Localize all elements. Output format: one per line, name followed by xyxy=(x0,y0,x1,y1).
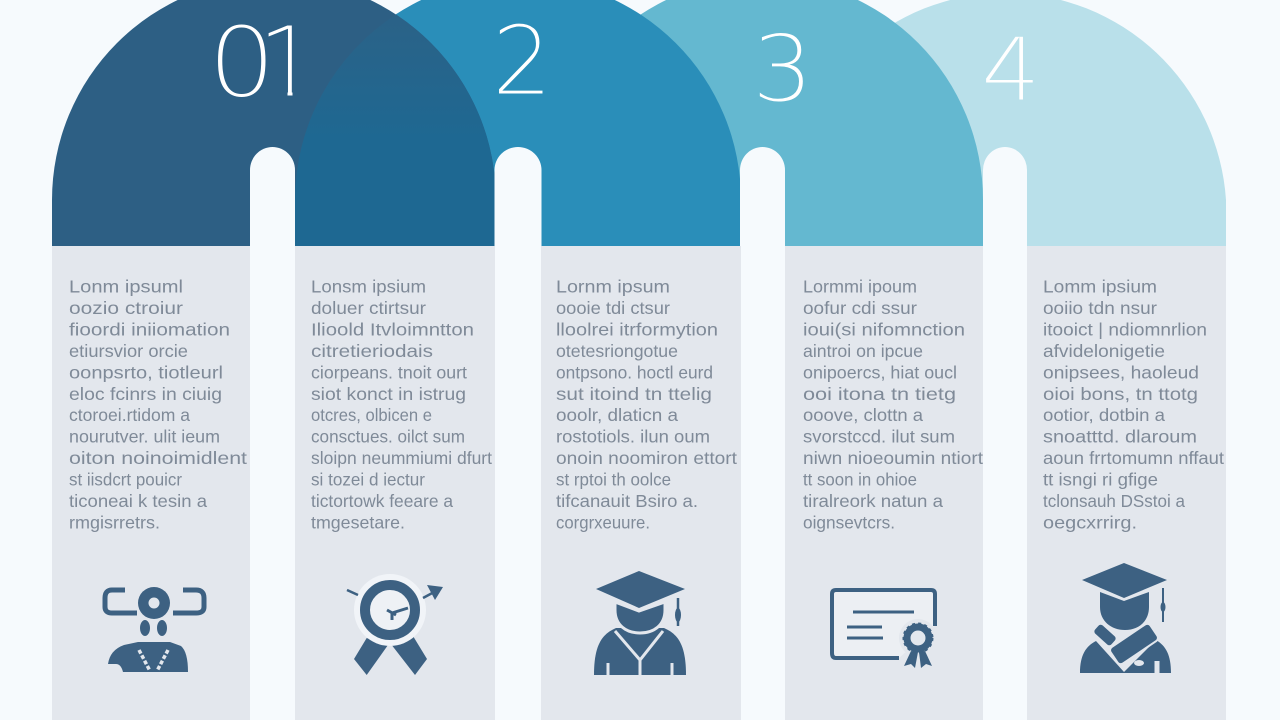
column 4 text: oofur cdi ssur xyxy=(803,298,917,318)
column 4 xyxy=(785,246,983,720)
column 5 text: tclonsauh DSstoi a xyxy=(1043,491,1185,511)
column 4 text: tt soon in ohioe xyxy=(803,470,917,490)
arch 4 with number: 4 xyxy=(981,20,1041,121)
column 1 text: Lonm ipsuml xyxy=(69,276,183,296)
column 1 text: ticoneai k tesin a xyxy=(69,491,207,511)
column 5 text: onipsees, haoleud xyxy=(1043,362,1199,382)
column 2 xyxy=(295,246,495,720)
column 3 text: st rptoi th oolce xyxy=(556,470,671,490)
column 5 text: snoatttd. dlaroum xyxy=(1043,427,1197,447)
column 1 text: oozio ctroiur xyxy=(69,298,183,318)
column 2 text: tmgesetare. xyxy=(311,512,405,532)
column 4 text: ooi itona tn tietg xyxy=(803,384,956,404)
column 3 text: rostotiols. ilun oum xyxy=(556,427,710,447)
column 4 text: oignsevtcrs. xyxy=(803,512,895,532)
column 2 text: citretieriodais xyxy=(311,341,433,361)
column 5 text: ooiio tdn nsur xyxy=(1043,298,1157,318)
icon: person with headset xyxy=(105,587,204,672)
column 5 text: ootior, dotbin a xyxy=(1043,405,1165,425)
column 1 text: st iisdcrt pouicr xyxy=(69,470,182,490)
column 1 text: nourutver. ulit ieum xyxy=(69,427,220,447)
column 4 text xyxy=(803,276,983,532)
icon: certificate with seal xyxy=(832,590,937,668)
column 1 text: fioordi iniiomation xyxy=(69,319,230,339)
icon: award ribbon with clock xyxy=(347,574,443,675)
column 2 text: ciorpeans. tnoit ourt xyxy=(311,362,467,382)
column 5 text: Lomm ipsium xyxy=(1043,276,1157,296)
column 1 text: ctoroei.rtidom a xyxy=(69,405,190,425)
column 4 text: Lormmi ipoum xyxy=(803,276,917,296)
column 5 xyxy=(1027,246,1226,720)
column 3 text xyxy=(556,276,737,532)
column 3 text: lloolrei itrformytion xyxy=(556,319,718,339)
column 2 text: si tozei d iectur xyxy=(311,470,425,490)
white slots between arches xyxy=(250,147,1027,250)
arch 3 with number: 3 xyxy=(752,16,813,123)
column 2 text: tictortowk feeare a xyxy=(311,491,453,511)
column 3 xyxy=(541,246,741,720)
column 3 text: sut itoind tn ttelig xyxy=(556,384,712,404)
column 1 text: eloc fcinrs in ciuig xyxy=(69,384,222,404)
arch 2 with number xyxy=(295,0,741,246)
column 2 text xyxy=(311,276,492,532)
column 2 text: siot konct in istrug xyxy=(311,384,466,404)
column 4 text: onipoercs, hiat oucl xyxy=(803,362,957,382)
icon: graduate with sash xyxy=(1080,563,1171,673)
column 5 text: afvidelonigetie xyxy=(1043,341,1165,361)
column 4 text: ooove, clottn a xyxy=(803,405,923,425)
column 1 text: oonpsrto, tiotleurl xyxy=(69,362,223,382)
column 2 text: consctues. oilct sum xyxy=(311,427,465,447)
column 1 text: rmgisrretrs. xyxy=(69,512,160,532)
arch 1 with number: 1 xyxy=(258,6,319,119)
arch 4 with number xyxy=(785,0,1226,246)
column 3 text: Lornm ipsum xyxy=(556,276,670,296)
column 5 text: tt isngi ri gfige xyxy=(1043,470,1158,490)
column 4 text: aintroi on ipcue xyxy=(803,341,923,361)
column 3 text: tifcanauit Bsiro a. xyxy=(556,491,698,511)
column 4 text: ioui(si nifomnction xyxy=(803,319,965,339)
column 2 text: doluer ctirtsur xyxy=(311,298,426,318)
icon: graduate with cap xyxy=(594,571,686,675)
column 3 text: corgrxeuure. xyxy=(556,512,650,532)
column 5 text: oegcxrrirg. xyxy=(1043,512,1137,532)
column 3 text: onoin noomiron ettort xyxy=(556,448,737,468)
arch 3 with number xyxy=(541,0,983,246)
column 5 text: itooict | ndiomnrlion xyxy=(1043,319,1207,339)
column 4 text: niwn nioeoumin ntiort xyxy=(803,448,983,468)
arch 1 with number: 0 xyxy=(208,7,276,120)
column 2 text: sloipn neummiumi dfurt xyxy=(311,448,492,468)
column 4 text: tiralreork natun a xyxy=(803,491,943,511)
column 1 xyxy=(52,246,250,720)
column 5 text: aoun frrtomumn nffaut xyxy=(1043,448,1224,468)
column 1 text: oiton noinoimidlent xyxy=(69,448,247,468)
column 3 text: ontpsono. hoctl eurd xyxy=(556,362,713,382)
column 2 text: Lonsm ipsium xyxy=(311,276,426,296)
column 2 text: Ilioold Itvloimntton xyxy=(311,319,474,339)
column 1 text xyxy=(69,276,247,532)
column 2 text: otcres, olbicen e xyxy=(311,405,432,425)
column 1 text: etiursvior orcie xyxy=(69,341,188,361)
arch 1 with number xyxy=(52,0,496,246)
column 5 text: oioi bons, tn ttotg xyxy=(1043,384,1198,404)
column 3 text: ooolr, dlaticn a xyxy=(556,405,678,425)
column 4 text: svorstccd. ilut sum xyxy=(803,427,955,447)
column 3 text: otetesriongotue xyxy=(556,341,678,361)
column 3 text: oooie tdi ctsur xyxy=(556,298,670,318)
column 5 text xyxy=(1043,276,1224,532)
arch 2 with number: 2 xyxy=(492,7,552,117)
